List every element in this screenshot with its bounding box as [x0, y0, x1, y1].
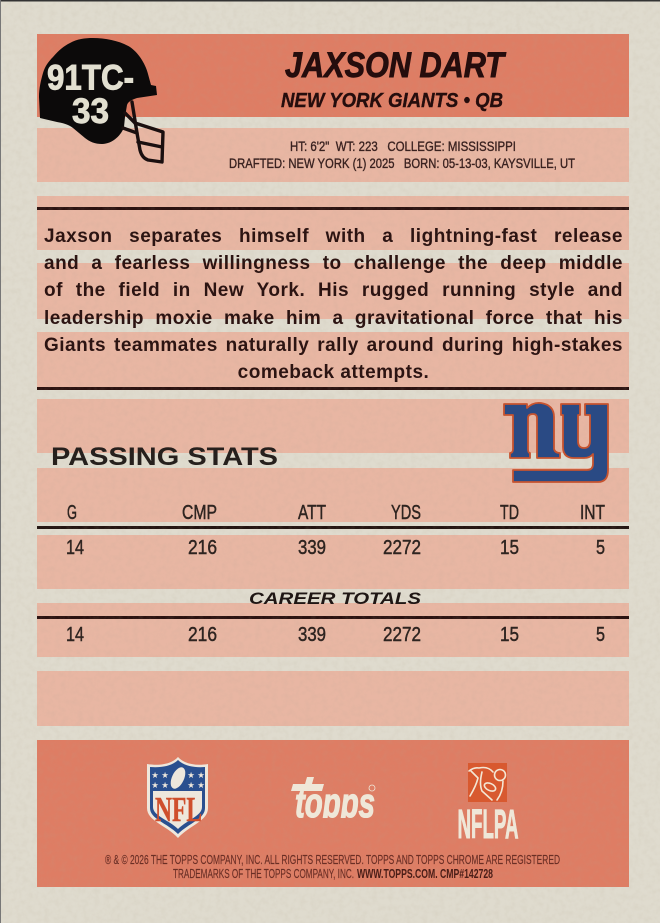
text block: height weight college: HT: 6'2" WT: 223 COLLEGE: MISSISSIPPI: [290, 139, 516, 154]
stats table header: CMP: [182, 502, 217, 524]
heading: passing stats: PASSING STATS: [51, 443, 278, 471]
icon: Topps logo: [291, 777, 376, 818]
season stats row: 5: [596, 537, 605, 559]
text block: player biography: [44, 226, 623, 383]
season stats row: 15: [500, 537, 519, 559]
text block: player biography: leadership moxie make him a gravitational force that his: [44, 308, 623, 329]
icon: NFL shield: ★: [187, 770, 195, 780]
panel: biography bands: [37, 196, 629, 387]
text block: draft and birth: DRAFTED: NEW YORK (1) 2025 BORN: 05-13-03, KAYSVILLE, UT: [229, 156, 575, 171]
text block: player biography: and a fearless willingness to challenge the deep middle: [44, 253, 623, 274]
icon: NFL shield: ★: [151, 780, 159, 790]
text block: copyright legal line 2: WWW.TOPPS.COM. CMP#142728: [357, 867, 493, 881]
stats table header: YDS: [391, 502, 421, 524]
text block: player biography: comeback attempts.: [238, 362, 429, 383]
stats table header: ATT: [298, 502, 326, 524]
icon: NFL shield: ★: [197, 770, 205, 780]
heading: career totals: CAREER TOTALS: [249, 589, 422, 608]
stats table header: INT: [580, 502, 605, 524]
stats table header: G: [67, 502, 77, 524]
text block: player biography: of the field in New York. His rugged running style and: [44, 280, 623, 301]
icon: Giants ny logo: [504, 403, 608, 482]
career stats row: 5: [596, 624, 605, 646]
text: NFLPA: [458, 801, 518, 847]
panel: name banner: [37, 34, 629, 117]
text block: player biography: Giants teammates naturally rally around during high-stakes: [44, 335, 623, 356]
icon: NFL shield: [147, 757, 208, 838]
career stats row: 216: [188, 624, 217, 646]
icon: NFL shield: ★: [151, 770, 159, 780]
stats table header: [67, 502, 605, 524]
career stats row: 339: [298, 624, 326, 646]
subtitle: team and position: NEW YORK GIANTS • QB: [281, 89, 503, 112]
text block: copyright legal line 2: TRADEMARKS OF THE TOPPS COMPANY, INC.: [173, 867, 354, 881]
panel: stats bands: [37, 399, 629, 726]
career stats row: 14: [66, 624, 84, 646]
panel: bio facts band: [37, 128, 629, 182]
career stats row: 15: [500, 624, 519, 646]
icon: NFL shield: ★: [161, 780, 169, 790]
icon: Topps logo: topps: [295, 779, 375, 826]
panel: footer banner: [37, 740, 629, 887]
career stats row: [66, 624, 605, 646]
season stats row: [66, 537, 605, 559]
card number: 33: [72, 92, 109, 131]
season stats row: 14: [66, 537, 84, 559]
stats table header: TD: [500, 502, 519, 524]
career stats row: 2272: [383, 624, 421, 646]
season stats row: 216: [188, 537, 217, 559]
season stats row: 339: [298, 537, 326, 559]
icon: NFL shield: ★: [197, 780, 205, 790]
card number: [47, 58, 134, 131]
icon: football helmet with card number: [39, 38, 163, 162]
icon: NFL shield: ★: [161, 770, 169, 780]
season stats row: 2272: [383, 537, 421, 559]
text block: player biography: Jaxson separates himself with a lightning-fast release: [44, 226, 623, 247]
icon: NFL shield: ★: [187, 780, 195, 790]
icon: NFLPA logo: [458, 763, 518, 847]
icon: NFL shield: NFL: [155, 790, 202, 829]
title: player name: JAXSON DART: [285, 46, 506, 85]
card number: 91TC-: [47, 58, 134, 98]
icon: helmet facemask: [123, 102, 163, 162]
